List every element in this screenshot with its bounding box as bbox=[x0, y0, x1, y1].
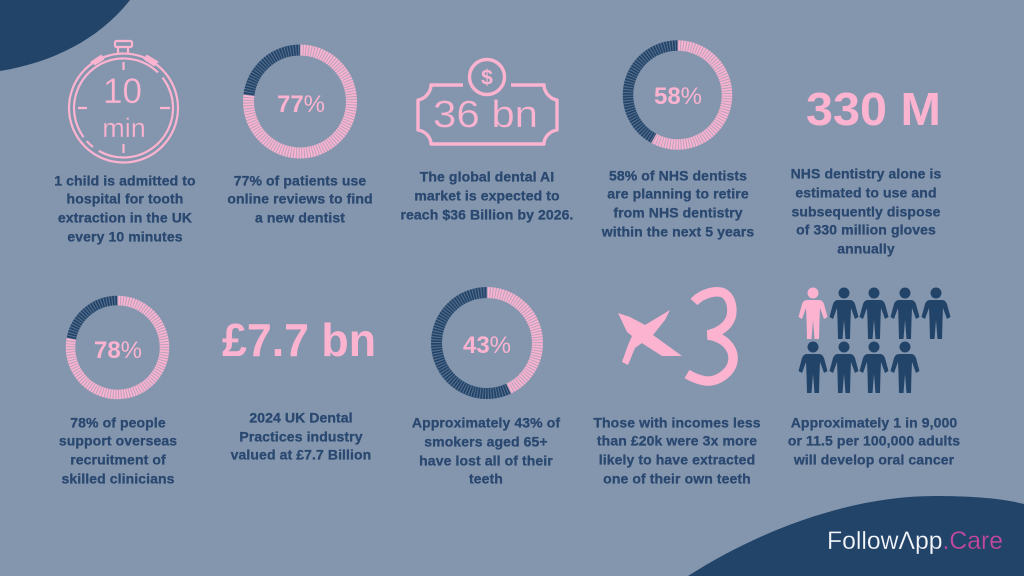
caption: market is expected to bbox=[414, 188, 560, 204]
caption: support overseas bbox=[59, 432, 177, 448]
donut chart 58% bbox=[628, 46, 727, 144]
caption: within the next 5 years bbox=[601, 224, 754, 240]
caption: 77% of patients use bbox=[234, 172, 366, 188]
caption: extraction in the UK bbox=[58, 210, 192, 226]
stopwatch unit: min bbox=[102, 113, 146, 143]
caption: Approximately 1 in 9,000 bbox=[791, 414, 957, 430]
stat: 1 in 9,000 bbox=[788, 288, 960, 468]
donut chart 78% bbox=[70, 300, 164, 394]
caption: teeth bbox=[469, 470, 503, 486]
stat: times three bbox=[593, 292, 761, 486]
icon: banknote bbox=[418, 60, 557, 144]
caption: online reviews to find bbox=[227, 190, 373, 206]
caption: 2024 UK Dental bbox=[249, 410, 353, 426]
icon: brush x3 bbox=[618, 292, 733, 381]
donut chart 77% bbox=[248, 50, 352, 153]
headline number: £7.7 bn bbox=[222, 314, 376, 366]
caption: will develop oral cancer bbox=[793, 452, 955, 468]
caption: estimated to use and bbox=[795, 184, 937, 200]
caption: or 11.5 per 100,000 adults bbox=[788, 432, 960, 448]
logo: FollowΛpp.Care bbox=[827, 527, 1003, 555]
donut chart 43% bbox=[436, 292, 538, 394]
caption: reach $36 Billion by 2026. bbox=[400, 206, 574, 222]
stat: 330 M bbox=[791, 83, 942, 256]
stat: 7.7 bn bbox=[222, 314, 376, 462]
caption: likely to have extracted bbox=[599, 452, 755, 468]
caption: recruitment of bbox=[70, 452, 166, 468]
caption: smokers aged 65+ bbox=[424, 434, 548, 450]
stat: 10 minutes bbox=[54, 39, 196, 245]
caption: a new dentist bbox=[255, 210, 345, 226]
caption: Practices industry bbox=[239, 428, 363, 444]
banknote value: 36 bn bbox=[433, 94, 538, 136]
caption: every 10 minutes bbox=[67, 228, 183, 244]
caption: NHS dentistry alone is bbox=[791, 166, 942, 182]
corner shape: top left bbox=[0, 0, 130, 71]
stat: 36 bn bbox=[400, 60, 574, 222]
caption: 78% of people bbox=[70, 414, 166, 430]
caption: are planning to retire bbox=[607, 186, 749, 202]
caption: than £20k were 3x more bbox=[597, 432, 757, 448]
stat: 77% bbox=[227, 50, 373, 226]
caption: annually bbox=[837, 240, 895, 256]
donut value: 58% bbox=[654, 83, 702, 110]
icon: stopwatch bbox=[54, 39, 193, 177]
caption: 58% of NHS dentists bbox=[609, 168, 747, 184]
pictogram: people bbox=[798, 288, 950, 393]
icon: dollar sign: $ bbox=[481, 66, 493, 90]
corner shape: bottom right bbox=[688, 496, 1024, 576]
caption: hospital for tooth bbox=[67, 190, 183, 206]
caption: 1 child is admitted to bbox=[54, 172, 196, 188]
donut value: 77% bbox=[277, 91, 325, 118]
caption: Approximately 43% of bbox=[412, 414, 560, 430]
caption: of 330 million gloves bbox=[796, 222, 936, 238]
caption: one of their own teeth bbox=[603, 470, 751, 486]
headline number: 330 M bbox=[806, 83, 941, 135]
caption: skilled clinicians bbox=[61, 470, 175, 486]
stat: 43% bbox=[412, 292, 560, 486]
caption: Those with incomes less bbox=[593, 414, 761, 430]
caption: subsequently dispose bbox=[791, 204, 941, 220]
donut value: 78% bbox=[94, 337, 142, 364]
stat: 78% bbox=[59, 300, 177, 486]
stat: 58% bbox=[601, 46, 754, 240]
caption: have lost all of their bbox=[419, 452, 553, 468]
caption: from NHS dentistry bbox=[613, 204, 743, 220]
caption: valued at £7.7 Billion bbox=[231, 446, 371, 462]
donut value: 43% bbox=[463, 332, 511, 359]
stopwatch value: 10 bbox=[103, 72, 142, 111]
caption: The global dental AI bbox=[420, 168, 554, 184]
